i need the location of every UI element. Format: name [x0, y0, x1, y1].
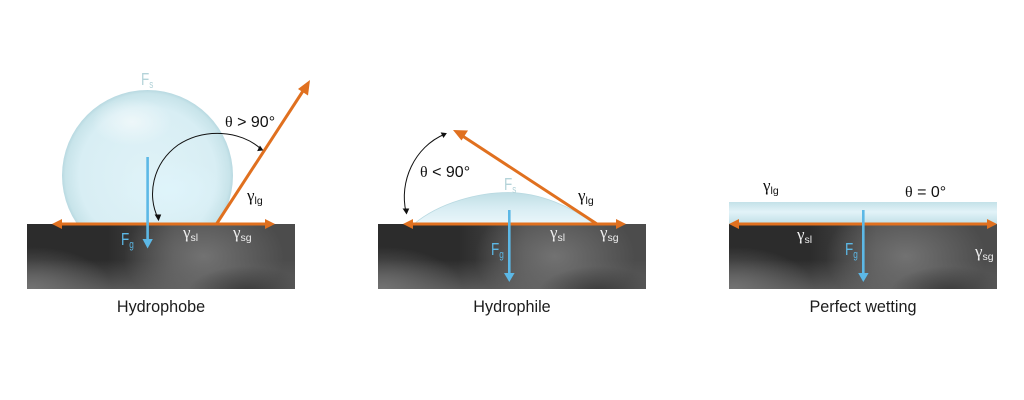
label: gamma sl: sl	[191, 232, 198, 244]
label: gamma lg: lg	[771, 185, 779, 197]
caption: Hydrophobe: Hydrophobe	[117, 298, 205, 316]
panel: hydrophobe	[27, 70, 310, 316]
caption: Hydrophile: Hydrophile	[473, 298, 551, 316]
label: gamma lg: lg	[255, 195, 263, 207]
label: theta < 90: θ < 90°	[420, 164, 470, 181]
label: gamma lg: lg	[586, 195, 594, 207]
label: Fg: F	[491, 240, 499, 260]
arrow: liquid-gas tension	[453, 130, 597, 224]
arrow: solid-liquid and solid-gas tension	[403, 219, 626, 229]
label: theta = 0: θ = 0°	[905, 184, 946, 201]
label: gamma sl: γ	[797, 225, 805, 244]
arrow: solid-liquid and solid-gas tension	[52, 219, 275, 229]
label: gamma sg: γ	[233, 223, 241, 242]
label: Fs: F	[141, 70, 149, 90]
label: Fg: g	[853, 249, 858, 261]
label: Fg: F	[845, 240, 853, 260]
water film	[729, 202, 997, 224]
arrow: contact angle	[404, 133, 446, 214]
substrate: hydrophile	[378, 224, 646, 289]
substrate: perfect wetting	[729, 224, 997, 289]
label: gamma sg: γ	[975, 242, 983, 261]
label: Fs: s	[149, 79, 153, 91]
label: gamma lg: γ	[578, 186, 586, 205]
label: Fg: g	[129, 239, 134, 251]
label: gamma sg: γ	[600, 223, 608, 242]
label: Fg: g	[499, 249, 504, 261]
water droplet	[62, 90, 233, 222]
label: Fs: F	[504, 175, 512, 195]
caption: Perfect wetting: Perfect wetting	[809, 298, 917, 316]
label: gamma sl: sl	[805, 234, 812, 246]
label: theta > 90: θ > 90°	[225, 114, 275, 131]
arrow: gravity	[142, 157, 153, 248]
arrow: gravity	[504, 210, 515, 282]
label: gamma sl: γ	[183, 223, 191, 242]
water droplet	[414, 192, 594, 224]
label: gamma lg: γ	[763, 176, 771, 195]
label: Fg: F	[121, 230, 129, 250]
arrow: contact angle	[153, 133, 262, 220]
label: gamma sl: γ	[550, 223, 558, 242]
label: gamma sg: sg	[983, 251, 994, 263]
panel: perfect wetting	[729, 176, 997, 316]
label: gamma sg: sg	[241, 232, 252, 244]
label: Fs: s	[512, 184, 516, 196]
label: gamma lg: γ	[247, 186, 255, 205]
label: gamma sg: sg	[608, 232, 619, 244]
substrate: hydrophobe	[27, 224, 295, 289]
arrow: liquid-gas tension	[216, 80, 310, 224]
label: gamma sl: sl	[558, 232, 565, 244]
arrow: solid-liquid and solid-gas tension	[729, 219, 997, 229]
arrow: gravity	[858, 210, 869, 282]
panel: hydrophile	[378, 130, 646, 316]
